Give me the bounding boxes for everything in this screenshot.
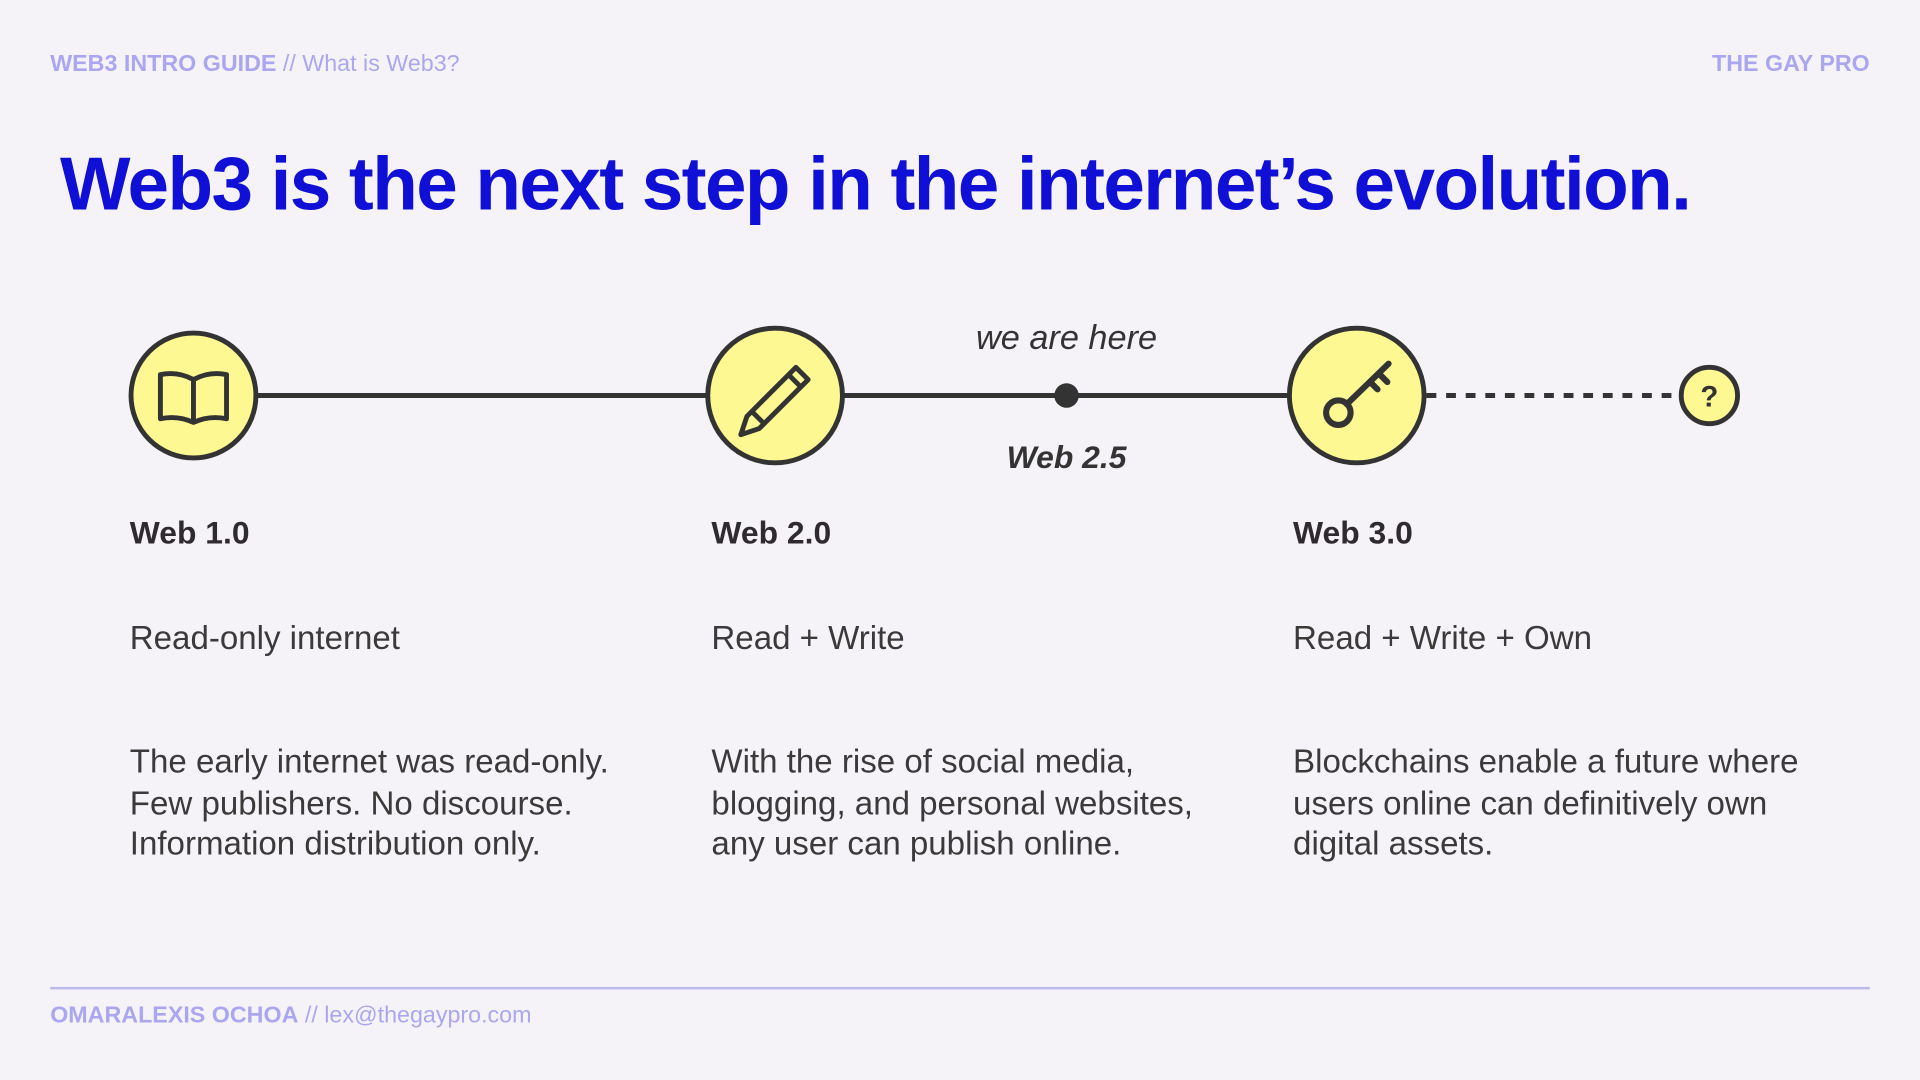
icon: question [1681,367,1738,424]
column: web 2.0 [711,514,1193,862]
icon: pencil [708,328,842,463]
column: web 2.0: Web 2.0 [711,514,831,551]
header right: THE GAY PRO [1712,51,1870,77]
icon: key [1289,328,1424,463]
column: web 3.0: Read + Write + Own [1293,620,1592,656]
header left: WEB3 INTRO GUIDE // What is Web3? [50,51,460,77]
column: web 3.0: Web 3.0 [1293,514,1413,551]
column: web 1.0: The early internet was read-only. [130,743,609,780]
title: Web3 is the next step in the internet’s evolution. [60,142,1690,225]
column: web 2.0: any user can publish online. [711,825,1121,862]
column: web 3.0: digital assets. [1293,825,1493,862]
icon: book [131,333,256,458]
column: web 1.0: Information distribution only. [130,825,541,862]
column: web 1.0 [130,514,609,862]
footer: OMARALEXIS OCHOA // lex@thegaypro.com [50,1003,532,1029]
column: web 2.0: With the rise of social media, [711,743,1134,780]
web 2.5 label: Web 2.5 [1007,438,1126,475]
column: web 1.0: Web 1.0 [130,514,250,551]
column: web 3.0 [1293,514,1798,862]
icon: question: ? [1700,381,1718,414]
column: web 1.0: Read-only internet [130,620,400,656]
timeline [128,326,1740,466]
column: web 2.0: blogging, and personal websites, [711,784,1193,821]
column: web 1.0: Few publishers. No discourse. [130,784,573,821]
we are here: we are here [976,318,1157,356]
dot: web 2.5 [1054,383,1079,408]
column: web 3.0: Blockchains enable a future where [1293,743,1798,780]
column: web 3.0: users online can definitively own [1293,784,1767,821]
column: web 2.0: Read + Write [711,620,905,656]
